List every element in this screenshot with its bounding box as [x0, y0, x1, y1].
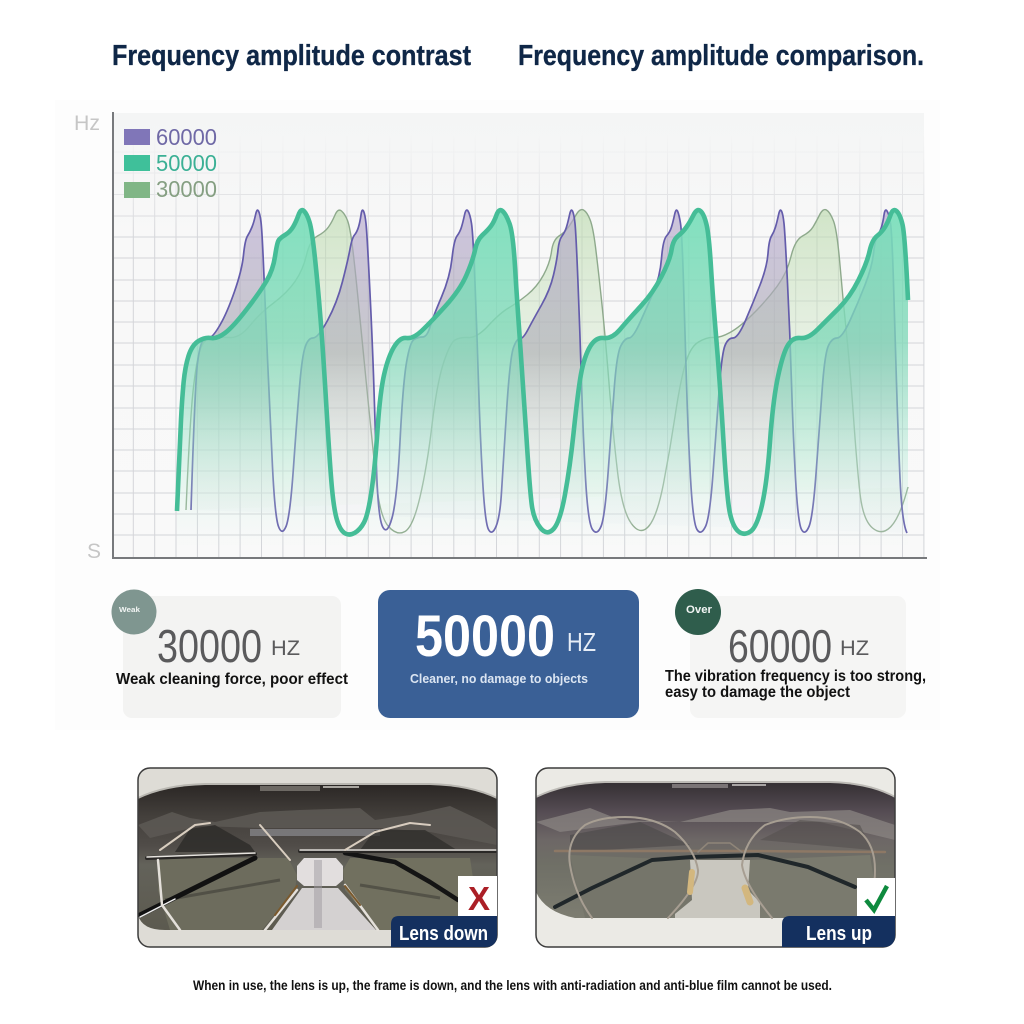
series: 50000 Hz — [177, 210, 908, 545]
value: 30000 HZ: HZ — [271, 637, 300, 660]
legend: 50000 — [156, 150, 217, 176]
value: 60000 HZ: 60000 — [728, 620, 832, 672]
icon: red X: X — [468, 880, 490, 917]
value: 30000 HZ: 30000 — [157, 620, 262, 672]
label: lens up: Lens up — [806, 923, 872, 945]
footnote: When in use, the lens is up, the frame is down, and the lens with anti-radiation and anti-blue film cannot be used. — [193, 978, 832, 993]
card: 50000 Hz best — [378, 590, 639, 718]
line chart: frequency over time — [74, 112, 927, 563]
badge: over: Over — [686, 604, 713, 616]
icon: red X — [458, 876, 497, 917]
legend: 30000 — [156, 176, 217, 202]
card: 30000 Hz weak — [112, 590, 348, 718]
badge: weak — [112, 590, 156, 634]
description: easy to damage the object — [665, 684, 850, 701]
photo: lens up — [536, 768, 895, 947]
badge: weak: Weak — [119, 605, 141, 614]
value: 50000 HZ: HZ — [567, 627, 596, 657]
nose bridge — [297, 858, 343, 886]
icon: green check — [857, 878, 895, 917]
value: 50000 HZ: 50000 — [415, 604, 555, 669]
title: frequency amplitude contrast: Frequency amplitude contrast — [112, 40, 471, 72]
series: 30000 Hz — [186, 210, 908, 533]
label: lens down — [391, 916, 497, 947]
label: lens up — [782, 916, 895, 947]
frames — [140, 823, 497, 930]
photo: lens down — [138, 768, 497, 947]
card: 60000 Hz over — [665, 589, 926, 718]
badge: over — [675, 589, 721, 635]
series: 60000 Hz — [191, 210, 907, 533]
description — [665, 668, 926, 701]
axis label: S: S — [87, 540, 101, 563]
title: frequency amplitude comparison: Frequency amplitude comparison. — [518, 40, 924, 72]
axes — [113, 112, 927, 558]
description: Cleaner, no damage to objects — [410, 672, 588, 686]
glasses frames — [555, 817, 885, 918]
description: The vibration frequency is too strong, — [665, 668, 926, 685]
legend — [124, 124, 217, 202]
label: lens down: Lens down — [399, 923, 488, 945]
legend: 60000 — [156, 124, 217, 150]
value: 60000 HZ: HZ — [840, 637, 869, 660]
description: Weak cleaning force, poor effect — [116, 671, 348, 688]
axis label: Hz: Hz — [74, 112, 100, 135]
